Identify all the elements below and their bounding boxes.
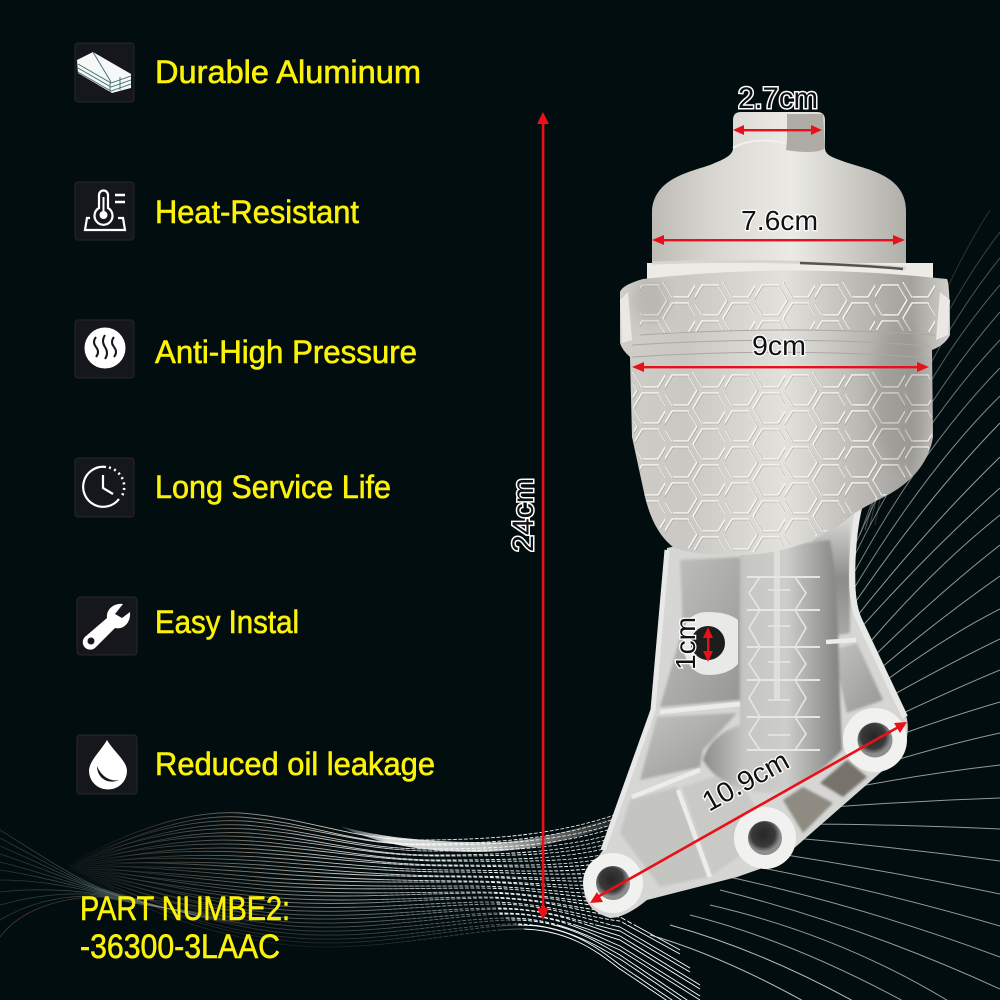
icon: clock — [75, 458, 134, 517]
label: long service life: Long Service Life — [155, 469, 391, 505]
part number: -36300-3LAAC — [80, 928, 280, 966]
arrow: 10.9cm — [590, 722, 907, 903]
arrow: overall height 24cm — [537, 112, 549, 920]
wave ribbon — [67, 813, 700, 1000]
label: reduced oil leakage: Reduced oil leakage — [155, 746, 435, 782]
label: heat resistant: Heat-Resistant — [155, 194, 359, 230]
icon: aluminum planks — [75, 43, 134, 102]
feature: long service life — [75, 458, 391, 517]
radiating fan lines — [650, 210, 1000, 1000]
mounting bracket — [583, 505, 908, 918]
label: 7.6cm: 7.6cm — [741, 205, 818, 236]
lower bowl with collar — [620, 270, 950, 555]
feature: reduced oil leakage — [77, 735, 435, 794]
feature: easy install — [77, 597, 299, 655]
arrow: 2.7cm — [733, 125, 822, 135]
wave highlight — [340, 815, 620, 852]
arrow: 9cm — [632, 362, 929, 372]
arrow: 1cm — [703, 627, 713, 662]
label: durable aluminum: Durable Aluminum — [155, 54, 421, 90]
wave dotted section — [374, 815, 634, 943]
arrow: 7.6cm — [652, 235, 905, 245]
label: 9cm: 9cm — [752, 330, 806, 361]
feature: heat resistant — [75, 182, 359, 240]
label: easy instal: Easy Instal — [155, 604, 299, 640]
product: oil filter housing — [583, 112, 950, 918]
label: anti high pressure: Anti-High Pressure — [155, 334, 417, 370]
label: 24cm: 24cm — [507, 478, 540, 552]
upper cap — [647, 112, 933, 285]
part number: PART NUMBE2: — [80, 890, 290, 928]
icon: oil drop — [77, 735, 137, 794]
label: 10.9cm: 10.9cm — [697, 745, 794, 817]
left twist of the wave ribbon — [0, 830, 258, 937]
label: 1cm: 1cm — [670, 617, 701, 670]
feature: durable aluminum — [75, 43, 421, 102]
feature: anti high pressure — [75, 320, 417, 378]
icon: thermometer — [75, 182, 134, 240]
part number — [80, 890, 290, 966]
icon: wrench — [77, 597, 137, 655]
label: 2.7cm: 2.7cm — [738, 82, 818, 115]
icon: pressure waves — [75, 320, 134, 378]
